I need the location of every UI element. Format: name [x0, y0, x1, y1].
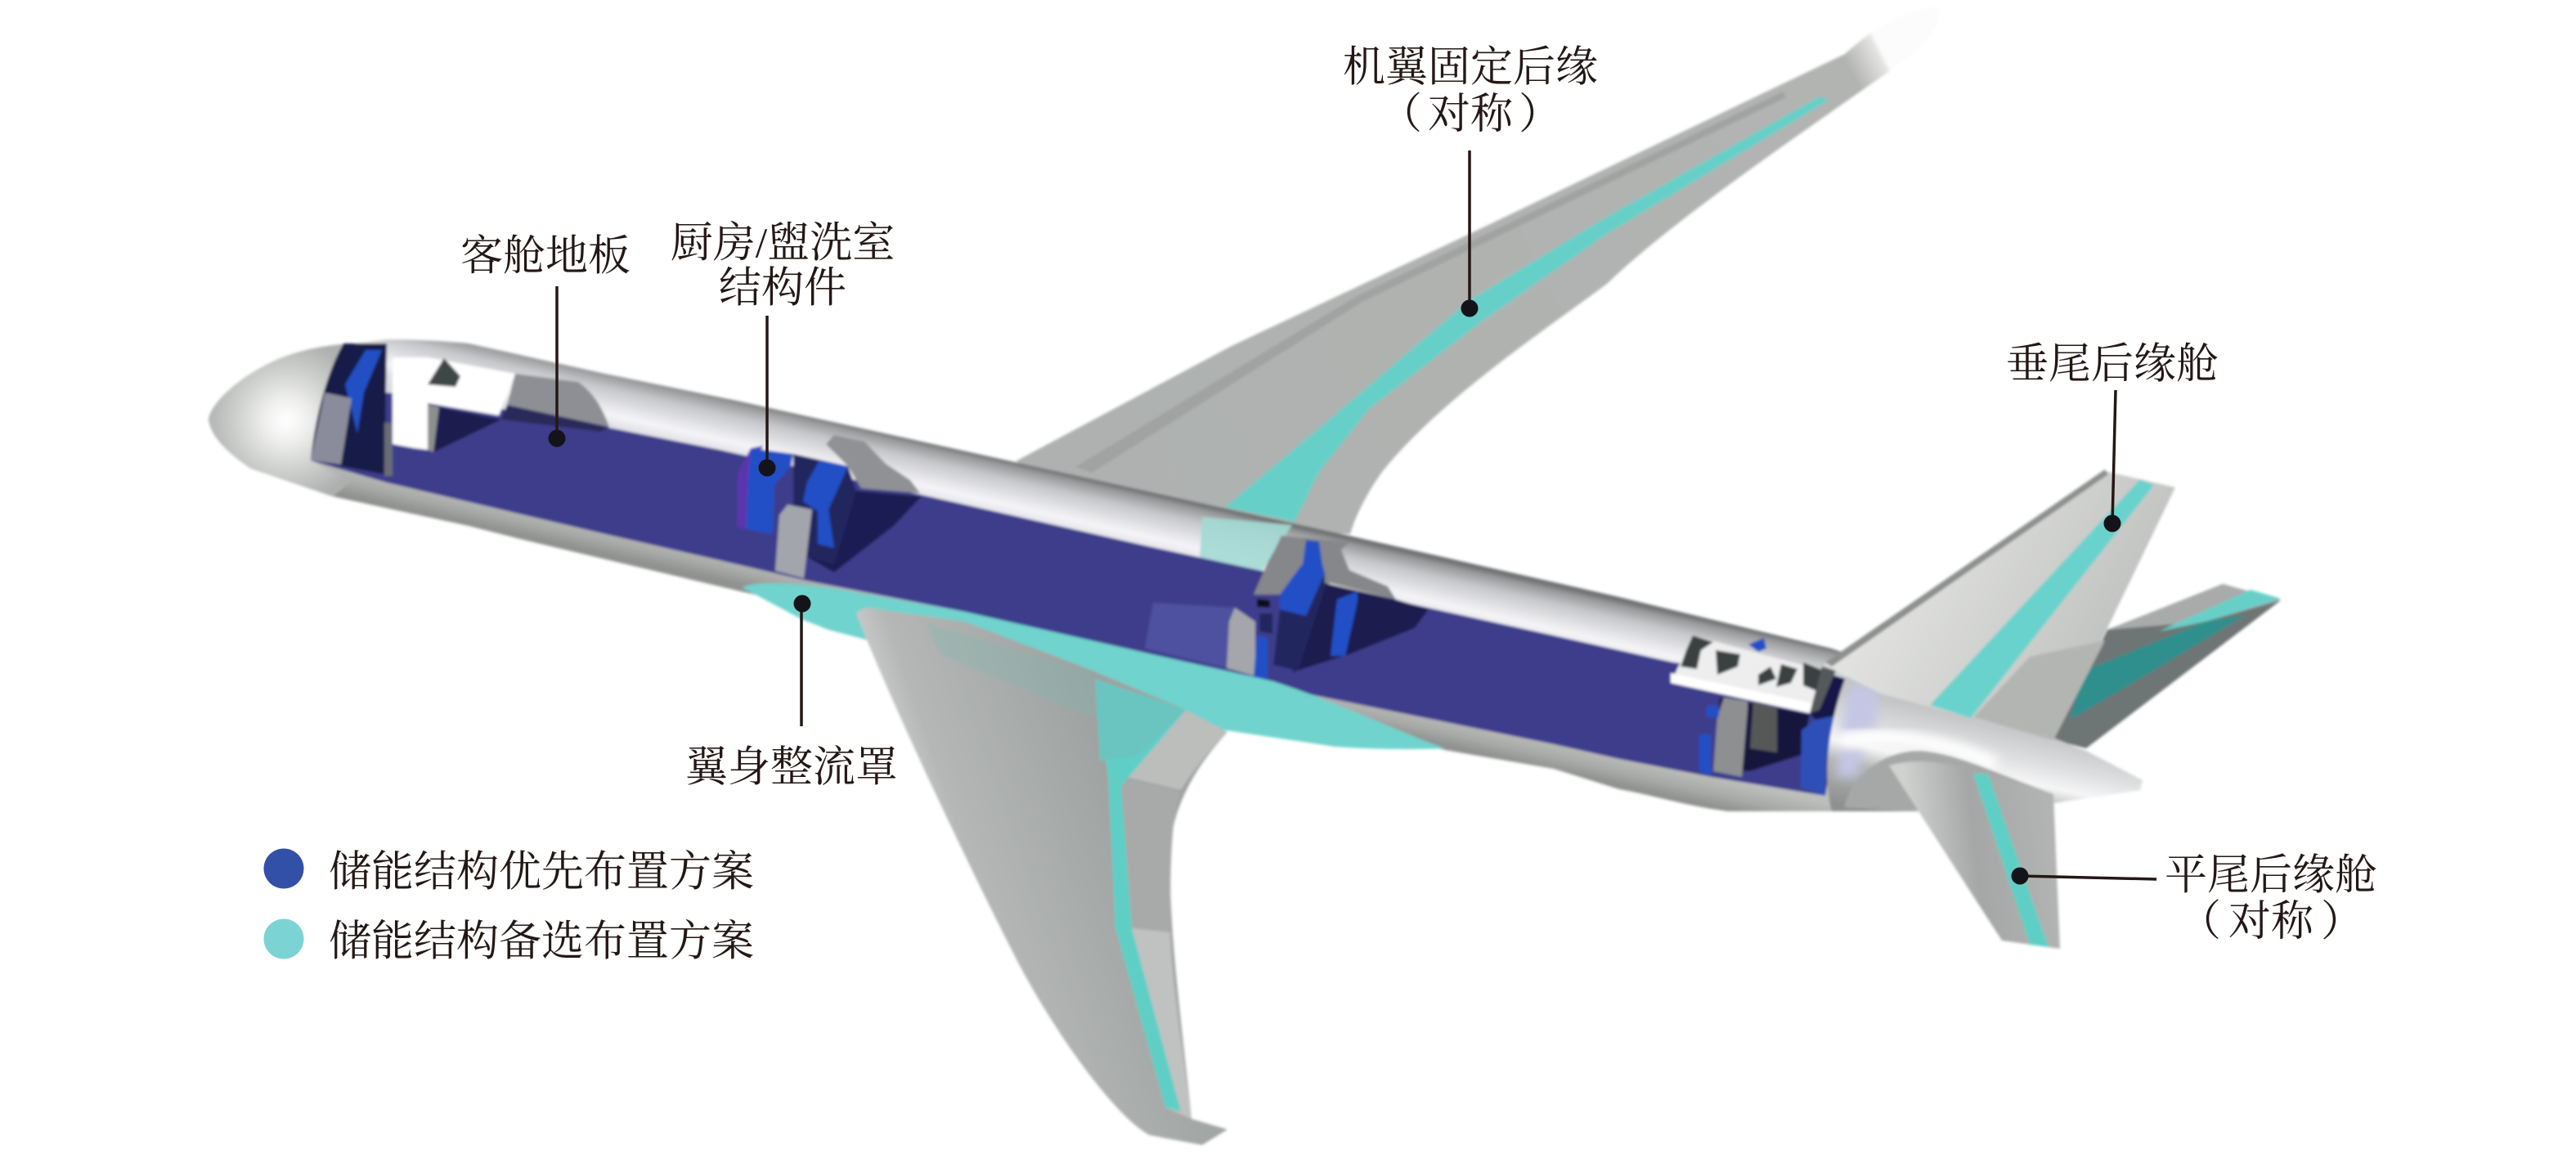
- legend: [263, 849, 754, 965]
- tail cone lavender ring: [1836, 683, 1877, 777]
- tail cone: [1827, 667, 2143, 811]
- label: wing-body fairing: [685, 595, 898, 792]
- green tint near wing root: [926, 623, 1097, 720]
- vertical tail teal strip: [1930, 479, 2154, 718]
- fuselage shell: [209, 339, 2143, 811]
- mid-aft galley structures: [1227, 536, 1429, 679]
- label: vertical tail trailing edge bay: [2006, 342, 2219, 532]
- far horizontal stabilizer: [2053, 584, 2281, 748]
- aircraft illustration: [209, 7, 2281, 1145]
- cabin floor: [311, 393, 1846, 796]
- wing stiffening strip: [1075, 92, 1786, 473]
- tail cone highlight: [1840, 737, 1995, 765]
- label: cabin floor: 客舱地板: [460, 234, 631, 280]
- label: horizontal tail trailing edge bay: 平尾后缘舱: [2165, 852, 2377, 900]
- label: wing fixed trailing edge: [1343, 44, 1598, 317]
- label: wing fixed trailing edge: （对称）: [1380, 92, 1561, 137]
- rear galley rack: [1671, 635, 1846, 796]
- teal seen through fuselage: [1200, 517, 1292, 571]
- label: galley and lavatory structures: [671, 221, 895, 476]
- wing-body fairing: [742, 583, 1445, 749]
- upper wing: [1016, 7, 1939, 534]
- label: cabin floor: [460, 234, 631, 447]
- label: wing-body fairing: 翼身整流罩: [685, 744, 898, 792]
- label: wing fixed trailing edge: 机翼固定后缘: [1343, 44, 1598, 92]
- label: galley and lavatory structures: 厨房/盥洗室: [671, 221, 895, 267]
- teal storage strip on wing: [1225, 97, 1829, 522]
- near wing flap: [1121, 710, 1227, 790]
- mid-forward galley and lavatory structures: [738, 435, 922, 578]
- legend: preferred layout: 储能结构优先布置方案: [329, 849, 754, 896]
- label: galley and lavatory structures: 结构件: [719, 265, 846, 312]
- near wing: [856, 608, 1227, 1145]
- nose cap: [209, 344, 352, 496]
- label: vertical tail trailing edge bay: 垂尾后缘舱: [2006, 342, 2219, 388]
- near horizontal stabilizer: [1889, 761, 2060, 949]
- label: horizontal tail trailing edge bay: [2012, 852, 2377, 945]
- grey bulkhead dome: [507, 374, 609, 427]
- front bulkhead and forward galley: [311, 344, 609, 476]
- stabilizer root underside: [1844, 751, 2053, 811]
- legend: alternative layout: 储能结构备选布置方案: [329, 919, 754, 965]
- light floor patch: [1145, 603, 1235, 668]
- stabilizer teal strip: [1973, 774, 2049, 947]
- near wing teal strip: [1095, 679, 1186, 1111]
- vertical tail: [1824, 469, 2175, 740]
- label: horizontal tail trailing edge bay: （对称）: [2179, 898, 2363, 945]
